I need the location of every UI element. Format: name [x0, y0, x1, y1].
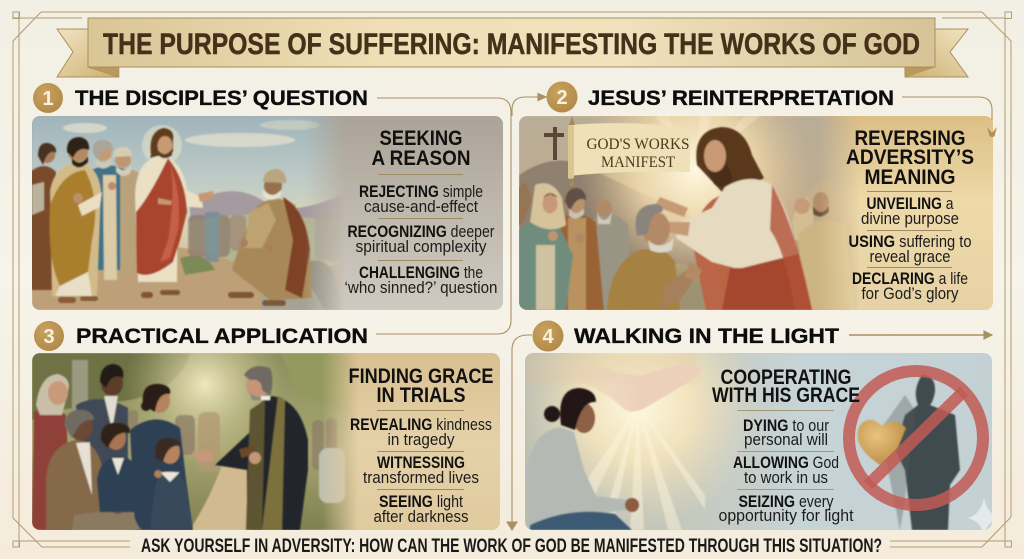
panel 2 heading	[846, 127, 974, 189]
panel 2 bullet list: USING suffering to	[848, 233, 972, 251]
arrow ornament	[987, 127, 997, 137]
number badge 4	[532, 320, 564, 352]
panel 4 bullet list: DYING to our	[743, 417, 829, 435]
panel 4 bullet list	[718, 410, 854, 525]
number badge 1: 1	[42, 88, 54, 110]
illustration: Jesus and disciples with seated man	[30, 116, 352, 310]
divine hand	[590, 366, 701, 412]
scroll banner	[568, 116, 690, 186]
title banner	[57, 18, 968, 77]
panel 4 heading: COOPERATING	[720, 366, 852, 389]
panel background	[519, 116, 993, 310]
section 2 heading	[546, 82, 894, 112]
illustration: Jesus healing the blind man	[519, 116, 855, 310]
scroll text	[587, 138, 689, 167]
dust particles	[883, 395, 914, 529]
heading text: WALKING IN THE LIGHT	[574, 325, 839, 348]
connector arrows	[376, 94, 992, 530]
cross on hill	[544, 127, 564, 160]
banner body	[88, 18, 935, 67]
panel 1 bullet list: cause-and-effect	[364, 198, 478, 216]
blue-robed disciple	[92, 140, 126, 280]
panel 3: practical application	[32, 353, 500, 530]
panel 4: walking in the light	[525, 353, 1000, 535]
panel 3 heading: FINDING GRACE	[348, 365, 494, 388]
banner right fold	[905, 67, 935, 77]
panel background	[32, 353, 500, 530]
section 3 heading	[34, 321, 368, 351]
light rays	[588, 432, 706, 530]
boy	[96, 422, 135, 513]
panel 4 bullet list: ALLOWING God	[733, 454, 839, 472]
panel 3 bullet list: after darkness	[374, 508, 468, 526]
panel 2 heading: ADVERSITY’S	[846, 146, 974, 169]
panel 4 heading	[712, 366, 860, 407]
Jesus	[135, 128, 214, 298]
panel 3 bullet list: transformed lives	[363, 469, 479, 487]
panel 1 bullet list: REJECTING simple	[359, 183, 483, 201]
panel background	[525, 353, 992, 530]
section 1 heading	[33, 83, 368, 113]
number badge 1	[33, 83, 63, 113]
woman in red with veil	[32, 374, 72, 530]
Jesus laying hands	[655, 127, 812, 310]
number badge 4: 4	[542, 326, 554, 348]
heading text: THE DISCIPLES’ QUESTION	[75, 87, 368, 110]
panel 1 bullet list	[344, 174, 498, 297]
light glow	[525, 353, 746, 514]
panel 3 heading: IN TRIALS	[376, 384, 466, 407]
woman seated	[526, 388, 639, 530]
man in dark suit	[76, 364, 128, 470]
heading text: PRACTICAL APPLICATION	[76, 325, 368, 348]
number badge 3	[34, 321, 64, 351]
number badge 2	[546, 82, 578, 112]
panel 3 bullet list: SEEING light	[379, 493, 463, 511]
far-left disciple	[30, 143, 58, 290]
panel 2: Jesus' reinterpretation	[519, 116, 997, 310]
seated man on rock	[228, 169, 345, 310]
panel 3 bullet list: REVEALING kindness	[350, 416, 492, 434]
kneeling blind man	[607, 204, 702, 310]
prohibition sign with silhouette	[849, 371, 983, 530]
panel 3 bullet list: in tragedy	[388, 431, 455, 449]
panel 1 bullet list: ‘who sinned?’ question	[344, 279, 498, 297]
section 4 heading	[532, 320, 839, 352]
panel 2 bullet list	[848, 191, 972, 303]
heart	[858, 420, 906, 465]
turbaned disciple	[113, 147, 141, 276]
panel 1 heading: A REASON	[372, 147, 470, 170]
gold-robed disciple	[49, 137, 102, 303]
banner left fold	[88, 67, 119, 77]
panel 1: the disciples' question	[30, 116, 503, 310]
scroll text: MANIFEST	[601, 154, 675, 171]
panel 2 heading: MEANING	[864, 166, 956, 189]
sparkle	[968, 498, 992, 530]
heading text: JESUS’ REINTERPRETATION	[588, 87, 894, 110]
woman in navy	[130, 384, 192, 530]
illustration: woman beneath divine hand	[525, 353, 1000, 535]
panel 4 bullet list: personal will	[744, 431, 828, 449]
panel 2 bullet list: divine purpose	[861, 210, 959, 228]
pastor in cassock	[192, 366, 308, 530]
panel 4 bullet list: to work in us	[744, 469, 828, 487]
panel 1 heading	[372, 127, 470, 170]
panel 4 bullet list: opportunity for light	[718, 507, 854, 525]
number badge 3: 3	[43, 326, 55, 348]
panel 3 bullet list	[350, 410, 492, 526]
panel 1 bullet list: spiritual complexity	[356, 238, 487, 256]
panel 2 bullet list: reveal grace	[870, 248, 950, 266]
panel background	[32, 116, 503, 310]
illustration: pastor speaking with family	[32, 353, 355, 530]
panel 4 heading: WITH HIS GRACE	[712, 384, 860, 407]
scroll text: GOD'S WORKS	[586, 136, 690, 153]
silhouette	[895, 375, 960, 530]
panel 2 bullet list: UNVEILING a	[866, 195, 954, 213]
panel 3 bullet list: WITNESSING	[377, 454, 465, 472]
number badge 2: 2	[556, 87, 568, 109]
panel 2 bullet list: for God’s glory	[862, 285, 959, 303]
panel 1 bullet list: CHALLENGING the	[359, 264, 483, 282]
no symbol	[849, 371, 983, 505]
banner right tail	[905, 29, 968, 77]
girl	[150, 438, 193, 530]
panel 3 heading	[348, 365, 494, 407]
onlookers left	[515, 182, 632, 310]
panel 2 heading: REVERSING	[854, 127, 966, 150]
panel 1 bullet list: RECOGNIZING deeper	[348, 223, 495, 241]
panel 1 heading: SEEKING	[380, 127, 462, 150]
onlookers right	[792, 191, 852, 310]
panel 4 bullet list: SEIZING every	[738, 493, 834, 511]
panel 2 bullet list: DECLARING a life	[852, 270, 968, 288]
banner left tail	[57, 29, 119, 77]
seated man in tan jacket	[46, 410, 142, 530]
